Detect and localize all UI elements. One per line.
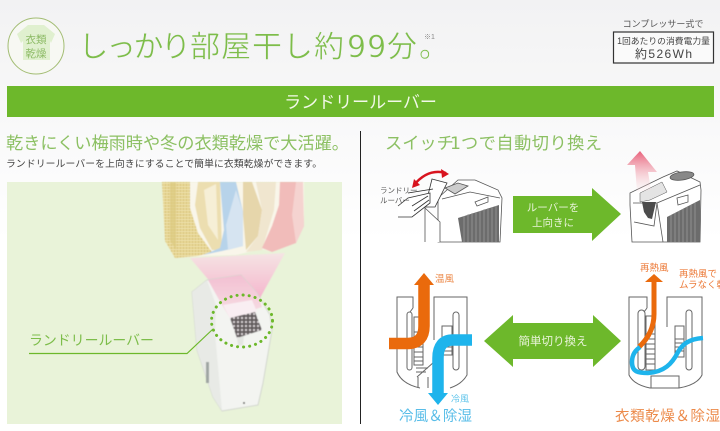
heading: left column: 乾きにくい梅雨時や冬の衣類乾燥で大活躍。 [6,133,349,153]
arrow: louver upward: ルーバーを [527,202,579,214]
callout: power consumption: 約526Wh [635,46,692,61]
callout: power consumption [614,18,714,63]
icon: laundry drying badge: 乾燥 [26,47,47,60]
label: laundry drying mode: 衣類乾燥＆除湿 [615,408,720,425]
sub: louver label [29,329,213,354]
panel: laundry photo [7,182,342,424]
title: しっかり [78,31,188,64]
footnote mark: ※1 [424,33,435,41]
arrow: easy switching: 簡単切り換え [518,334,588,348]
sub: rising warm air arrow [627,151,657,192]
chart: cooling airflow diagram [389,273,472,405]
arrow: louver upward [513,188,621,241]
sub: even drying note: 再熱風で [679,268,717,280]
heading: right column: つで自動切り換え [461,133,603,153]
title: 部屋干し約 [190,31,345,64]
arrow: easy switching [484,315,621,367]
callout: power consumption: コンプレッサー式で [623,18,703,29]
sub: warm air label: 温風 [435,274,455,285]
sub: hanging clothes [162,182,304,258]
arrow: louver upward: 上向きに [532,216,574,229]
heading: right column: スイッチ [385,133,454,153]
icon: laundry drying badge: 衣類 [26,34,47,46]
sub: reheated air arrow [639,274,663,347]
label: cooling mode: 冷風＆除湿 [399,408,472,425]
text block: left description: ランドリールーバーを上向きにすることで簡単に衣類乾燥ができます。 [6,157,322,170]
title: 99 [347,30,387,65]
sub: hand [398,179,447,217]
sub: louver label: ランドリー [380,186,418,195]
sub: rotation arrow [412,169,449,188]
callout: power consumption: 1回あたりの消費電力量 [617,35,710,46]
sub: cool air arrow [428,340,472,405]
icon: device with louver up [627,151,701,242]
sub: cool air curve [632,338,703,373]
heading: right column: 1 [450,134,461,154]
sub: even drying note [679,268,720,291]
sub: dehumidifier [192,275,272,411]
sub: louver label [380,186,433,205]
banner [7,86,714,117]
title: 分 [387,31,417,64]
title: 。 [419,31,449,64]
sub: louver highlight circle [212,295,272,347]
icon: device with hand on louver [380,169,502,242]
sub: cool air label: 冷風 [451,393,469,404]
sub: warm air cone [190,253,285,298]
sub: louver label: ランドリールーバー [29,332,154,348]
banner: ランドリールーバー [284,93,437,112]
icon: laundry drying badge [8,18,64,74]
sub: reheated air label: 再熱風 [640,262,669,274]
sub: louver label: ルーバー [380,196,410,205]
sub: warm air arrow [389,273,434,344]
column separator [360,131,361,424]
chart: laundry-drying airflow diagram [629,262,720,388]
